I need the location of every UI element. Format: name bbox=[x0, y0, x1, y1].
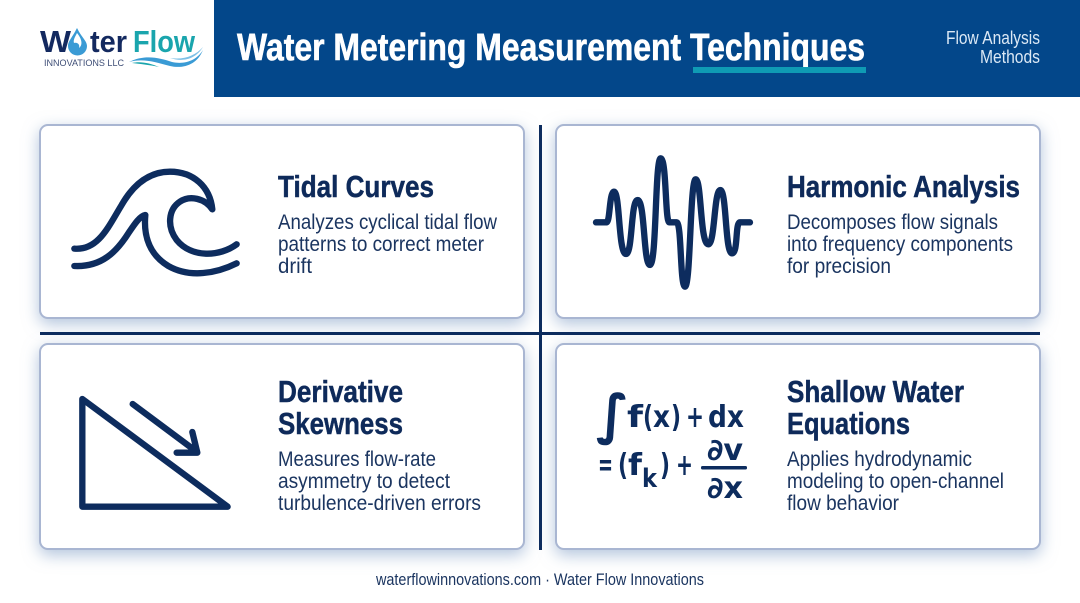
panel: harmonic analysis bbox=[556, 125, 1040, 318]
description: Analyzes cyclical tidal flow bbox=[278, 211, 498, 234]
heading bbox=[278, 374, 403, 441]
icon: equations: ∫ bbox=[596, 383, 629, 446]
icon: equations: x bbox=[653, 400, 670, 435]
description: asymmetry to detect bbox=[278, 470, 450, 493]
icon: equations: = bbox=[598, 448, 613, 483]
description bbox=[787, 211, 1013, 278]
description: modeling to open-channel bbox=[787, 470, 1004, 493]
icon: waveform bbox=[596, 158, 750, 287]
icon: equations: ( bbox=[618, 448, 628, 483]
heading: Skewness bbox=[278, 406, 403, 441]
header banner bbox=[214, 0, 1080, 97]
header subtitle: Flow Analysis bbox=[946, 28, 1040, 48]
header subtitle bbox=[946, 28, 1040, 67]
footer: waterflowinnovations.com · Water Flow Innovations bbox=[375, 571, 704, 589]
logo: Flow bbox=[133, 24, 196, 59]
heading: Derivative bbox=[278, 374, 403, 409]
heading: Harmonic Analysis bbox=[787, 169, 1020, 204]
panel: tidal curves bbox=[40, 125, 524, 318]
description bbox=[278, 448, 481, 515]
icon: equations: ) bbox=[660, 448, 670, 483]
icon: equations: + bbox=[676, 448, 693, 483]
description: Decomposes flow signals bbox=[787, 211, 998, 234]
title: Water Metering Measurement Techniques bbox=[237, 27, 865, 69]
icon: triangle slope with arrow bbox=[82, 399, 228, 507]
icon: equations: f bbox=[628, 448, 643, 483]
logo: ter bbox=[90, 24, 127, 59]
logo: W bbox=[40, 24, 72, 59]
description: patterns to correct meter bbox=[278, 233, 484, 256]
logo: INNOVATIONS LLC bbox=[44, 58, 124, 69]
panel: shallow water equations bbox=[556, 344, 1040, 549]
heading: Equations bbox=[787, 406, 910, 441]
description: drift bbox=[278, 255, 312, 278]
description: into frequency components bbox=[787, 233, 1013, 256]
description: flow behavior bbox=[787, 492, 899, 515]
icon: equations: f bbox=[627, 400, 644, 435]
icon: equations: ) bbox=[671, 400, 681, 435]
title underline bbox=[693, 67, 866, 73]
icon: equations: ∂x bbox=[707, 471, 743, 506]
description bbox=[787, 448, 1004, 515]
icon: equations bbox=[596, 383, 747, 506]
heading: Shallow Water bbox=[787, 374, 964, 409]
heading bbox=[787, 374, 964, 441]
logo bbox=[40, 24, 203, 69]
icon: equations: ( bbox=[643, 400, 653, 435]
icon: equations: k bbox=[642, 464, 658, 494]
description bbox=[278, 211, 498, 278]
heading: Tidal Curves bbox=[278, 169, 434, 204]
panel: derivative skewness bbox=[40, 344, 524, 549]
icon: equations: ∂v bbox=[707, 433, 743, 468]
icon: equations: + bbox=[686, 400, 704, 435]
description: Applies hydrodynamic bbox=[787, 448, 972, 471]
icon: equations: dx bbox=[708, 400, 744, 435]
header subtitle: Methods bbox=[980, 47, 1040, 67]
description: for precision bbox=[787, 255, 891, 278]
icon: wave bbox=[74, 172, 237, 273]
description: turbulence-driven errors bbox=[278, 492, 481, 515]
description: Measures flow-rate bbox=[278, 448, 436, 471]
